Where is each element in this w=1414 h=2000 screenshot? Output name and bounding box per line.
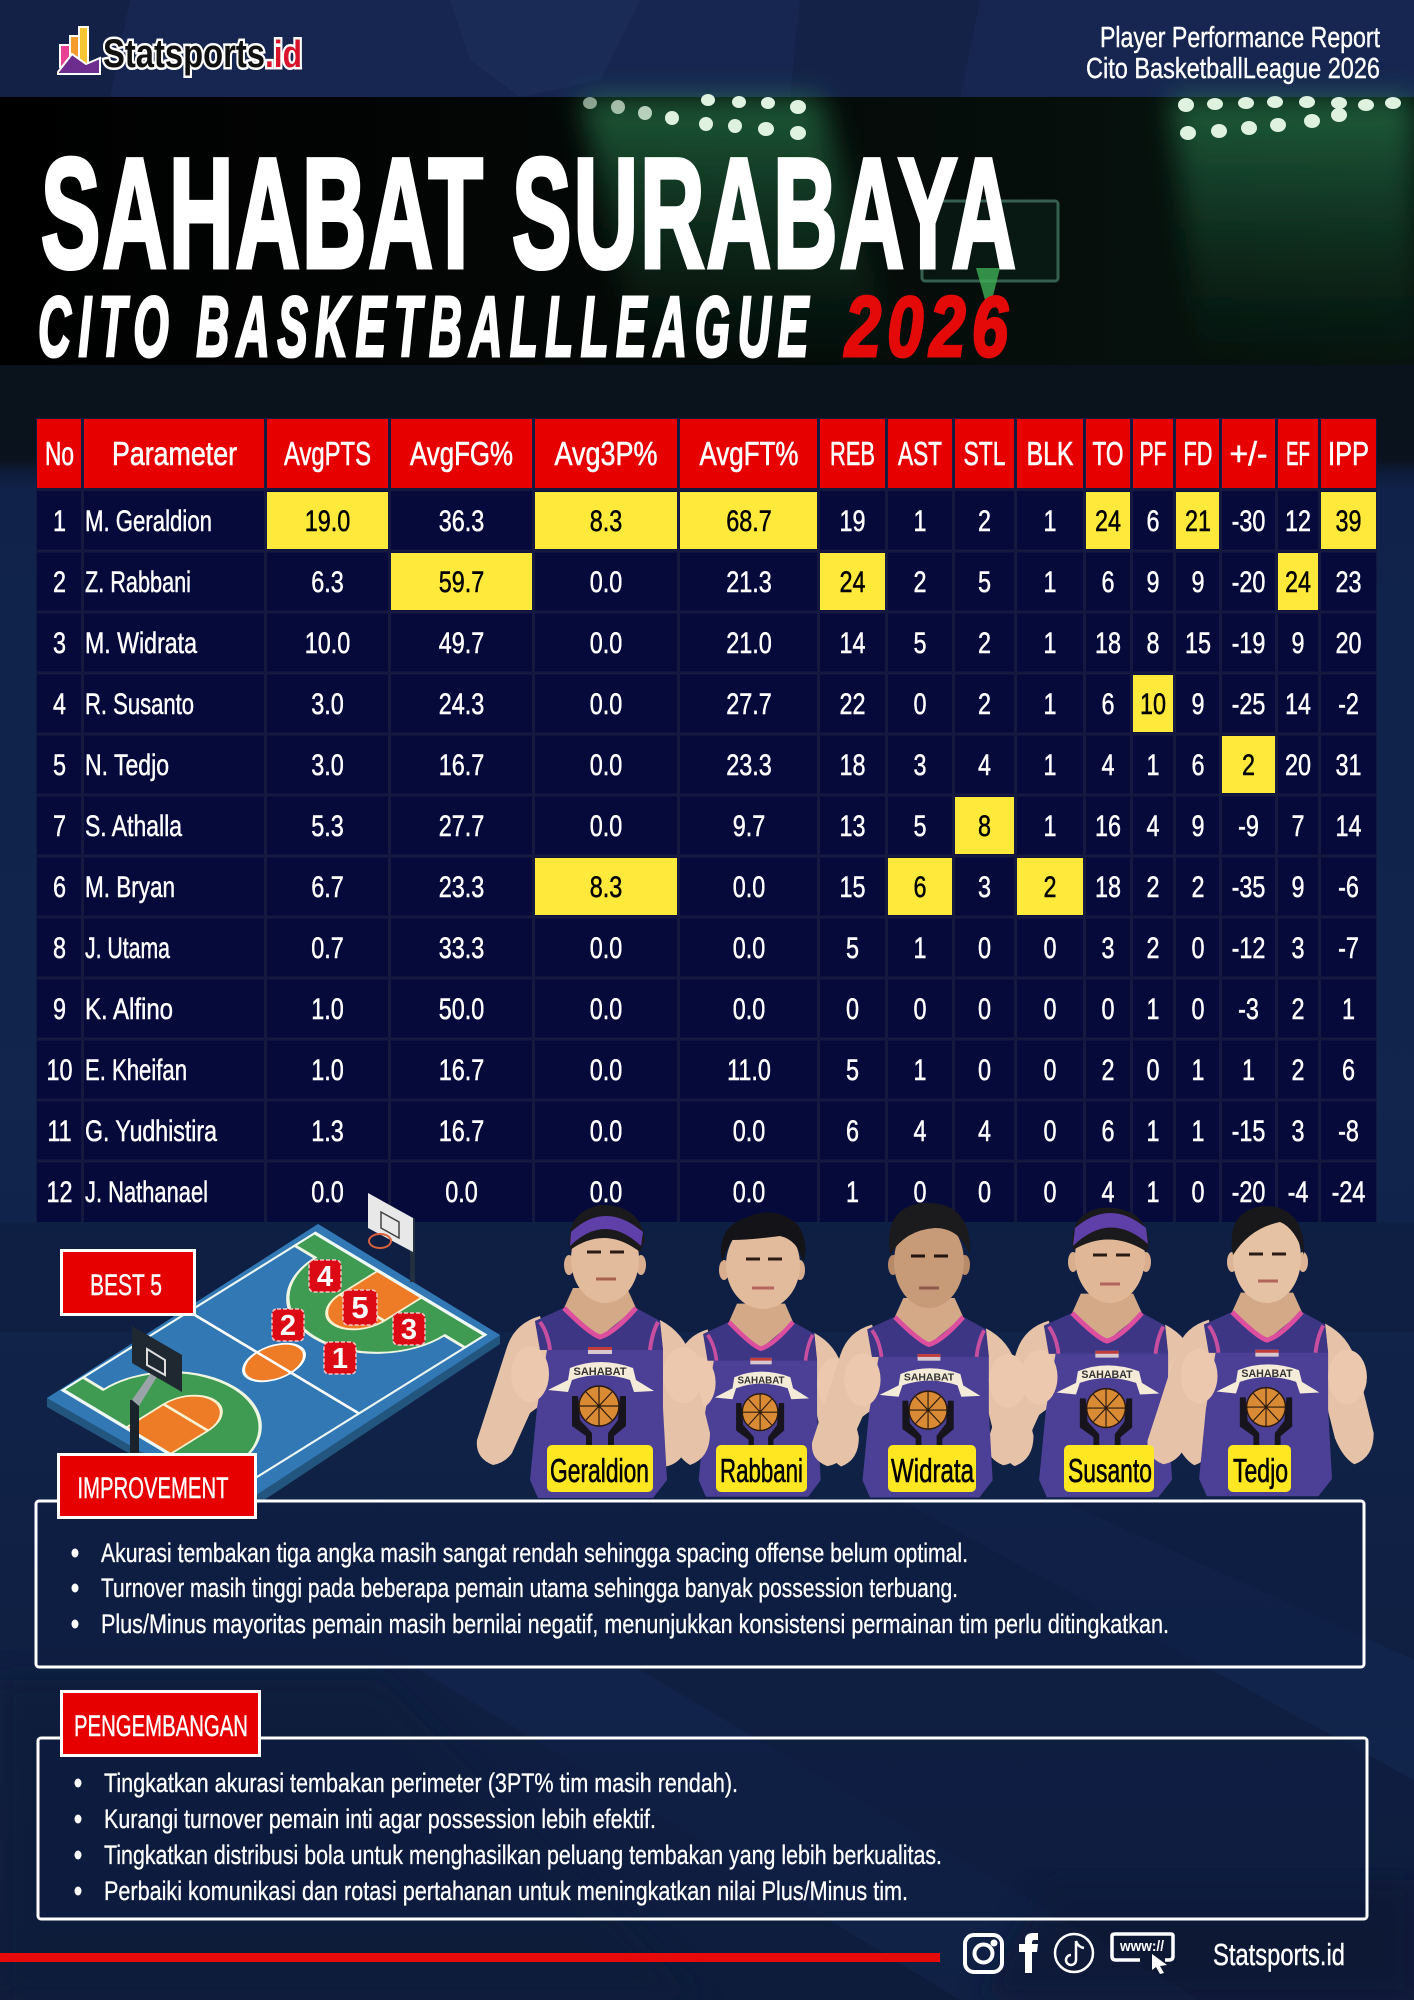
row: J. Nathanael: 1 <box>1146 1175 1160 1209</box>
row: Z. Rabbani <box>53 565 1362 599</box>
row: N. Tedjo: 2 <box>1242 748 1255 782</box>
row: M. Bryan: 18 <box>1095 870 1121 904</box>
row: G. Yudhistira: 6 <box>1101 1114 1115 1148</box>
row: S. Athalla: 16 <box>1095 809 1121 843</box>
row: N. Tedjo: 31 <box>1335 748 1362 782</box>
isometric court with best five positions <box>47 1193 500 1516</box>
player: Rabbani: SAHABAT <box>737 1376 785 1387</box>
row: E. Kheifan <box>46 1053 1355 1087</box>
row: M. Widrata: 3 <box>53 626 66 660</box>
row: Z. Rabbani: Z. Rabbani <box>85 566 191 599</box>
tag: PENGEMBANGAN: PENGEMBANGAN <box>74 1710 248 1743</box>
row: M. Widrata: 15 <box>1185 626 1211 660</box>
icon: floodlights left cluster <box>583 94 806 140</box>
table header row: AvgFT% <box>700 435 798 472</box>
table body cells <box>37 491 1376 1222</box>
row: E. Kheifan: 5 <box>846 1053 859 1087</box>
position marker 2: 2 <box>280 1310 296 1342</box>
position marker 1: 1 <box>332 1343 348 1375</box>
icon: facebook <box>1019 1933 1038 1973</box>
row: M. Bryan: -6 <box>1338 870 1359 904</box>
table header row: AvgFG% <box>410 435 513 472</box>
table header row: Parameter <box>112 435 237 472</box>
player: Geraldion <box>477 1205 710 1498</box>
row: M. Geraldion: 68.7 <box>726 504 772 538</box>
row: M. Bryan: M. Bryan <box>85 871 175 904</box>
row: J. Nathanael: 4 <box>1101 1175 1115 1209</box>
row: R. Susanto <box>53 687 1359 721</box>
row: K. Alfino: 0.0 <box>733 992 765 1026</box>
row: J. Nathanael: 0 <box>1191 1175 1205 1209</box>
row: J. Nathanael: 0.0 <box>590 1175 622 1209</box>
row: S. Athalla: 7 <box>53 809 66 843</box>
player: Geraldion: SAHABAT <box>574 1366 627 1378</box>
row: G. Yudhistira: 3 <box>1291 1114 1305 1148</box>
row: J. Nathanael: 12 <box>46 1175 73 1209</box>
row: M. Widrata: 14 <box>839 626 866 660</box>
row: M. Geraldion: M. Geraldion <box>85 505 212 538</box>
position marker 4: 4 <box>317 1261 333 1293</box>
row: J. Nathanael: -20 <box>1232 1175 1265 1209</box>
row: M. Bryan: 23.3 <box>439 870 484 904</box>
highlighted best values <box>267 492 1376 915</box>
player: Susanto <box>987 1208 1214 1497</box>
improvement bullets <box>72 1538 1169 1639</box>
row: J. Utama: 0 <box>978 931 991 965</box>
tag: IMPROVEMENT <box>58 1454 256 1518</box>
row: G. Yudhistira: 1 <box>1146 1114 1160 1148</box>
row: J. Utama: 1 <box>913 931 927 965</box>
player: Susanto: SAHABAT <box>1081 1369 1133 1381</box>
table header row: STL <box>964 435 1006 472</box>
icon: background hoop <box>922 201 1058 300</box>
table header row: TO <box>1092 435 1124 472</box>
row: M. Widrata: -19 <box>1232 626 1265 660</box>
row: R. Susanto: -25 <box>1232 687 1265 721</box>
improvement bullets: Plus/Minus mayoritas pemain masih bernilai negatif, menunjukkan konsistensi permainan tim perlu ditingkatkan. <box>101 1609 1169 1639</box>
row: E. Kheifan: 2 <box>1101 1053 1115 1087</box>
row: J. Nathanael: -24 <box>1332 1175 1365 1209</box>
row: J. Nathanael: 1 <box>846 1175 859 1209</box>
row: J. Utama: 0.7 <box>311 931 344 965</box>
row: R. Susanto: 0 <box>913 687 927 721</box>
row: N. Tedjo: 4 <box>978 748 991 782</box>
row: R. Susanto: 3.0 <box>311 687 344 721</box>
row: M. Bryan: 6 <box>53 870 66 904</box>
row: S. Athalla: -9 <box>1238 809 1259 843</box>
name tag: Tedjo: Tedjo <box>1233 1452 1288 1489</box>
row: K. Alfino: 1.0 <box>311 992 344 1026</box>
name tag: Geraldion: Geraldion <box>550 1452 649 1489</box>
row: M. Geraldion: 8.3 <box>590 504 622 538</box>
row: M. Bryan: -35 <box>1232 870 1265 904</box>
row: Z. Rabbani: 59.7 <box>439 565 484 599</box>
position marker 3: 3 <box>401 1314 417 1346</box>
row: G. Yudhistira: -8 <box>1338 1114 1359 1148</box>
row: Z. Rabbani: 24 <box>839 565 866 599</box>
row: N. Tedjo: 1 <box>1146 748 1160 782</box>
pengembangan bullets: Perbaiki komunikasi dan rotasi pertahanan untuk meningkatkan nilai Plus/Minus tim. <box>104 1876 908 1906</box>
row: J. Nathanael: 0 <box>978 1175 991 1209</box>
row: E. Kheifan: 1 <box>1191 1053 1205 1087</box>
row: M. Geraldion: 1 <box>1043 504 1057 538</box>
row: M. Bryan: 0.0 <box>733 870 765 904</box>
row: S. Athalla: 7 <box>1291 809 1305 843</box>
row: S. Athalla <box>53 809 1362 843</box>
row: N. Tedjo: 4 <box>1101 748 1115 782</box>
row: Z. Rabbani: 23 <box>1335 565 1362 599</box>
row: J. Utama: 3 <box>1291 931 1305 965</box>
name tag: Geraldion <box>547 1445 653 1492</box>
row: M. Geraldion: -30 <box>1232 504 1265 538</box>
row: J. Utama: -12 <box>1232 931 1265 965</box>
row: G. Yudhistira: G. Yudhistira <box>85 1115 217 1148</box>
row: M. Geraldion: 1 <box>913 504 927 538</box>
row: M. Widrata: 49.7 <box>439 626 484 660</box>
improvement bullets: Turnover masih tinggi pada beberapa pemain utama sehingga banyak possession terbuang. <box>101 1573 958 1603</box>
row: M. Widrata <box>53 626 1362 660</box>
row: J. Nathanael: 0.0 <box>733 1175 765 1209</box>
table header row: IPP <box>1328 435 1369 472</box>
row: K. Alfino: 1 <box>1146 992 1160 1026</box>
name tag: Tedjo <box>1228 1445 1291 1492</box>
name tag: Susanto <box>1064 1445 1154 1492</box>
row: M. Geraldion: 36.3 <box>439 504 484 538</box>
player: Tedjo: SAHABAT <box>1241 1368 1293 1380</box>
row: K. Alfino: 1 <box>1342 992 1355 1026</box>
row: K. Alfino: 0 <box>1043 992 1057 1026</box>
tag: IMPROVEMENT: IMPROVEMENT <box>78 1472 228 1505</box>
row: J. Utama: J. Utama <box>85 932 170 965</box>
row: K. Alfino: K. Alfino <box>85 993 173 1026</box>
row: G. Yudhistira: 4 <box>978 1114 991 1148</box>
row: M. Widrata: 1 <box>1043 626 1057 660</box>
hero panel: stadium lights and hoop <box>0 94 1414 365</box>
row: J. Nathanael: 0 <box>913 1175 927 1209</box>
row: N. Tedjo: N. Tedjo <box>85 749 169 782</box>
player: Widrata <box>812 1203 1034 1498</box>
row: Z. Rabbani: 6 <box>1101 565 1115 599</box>
row: K. Alfino: 0 <box>978 992 991 1026</box>
row: G. Yudhistira: 16.7 <box>439 1114 484 1148</box>
row: Z. Rabbani: 0.0 <box>590 565 622 599</box>
table header row: +/- <box>1230 435 1268 472</box>
row: Z. Rabbani: -20 <box>1232 565 1265 599</box>
row: R. Susanto: R. Susanto <box>85 688 194 721</box>
row: R. Susanto: 0.0 <box>590 687 622 721</box>
row: J. Utama: 5 <box>846 931 859 965</box>
row: M. Widrata: M. Widrata <box>85 627 197 660</box>
row: G. Yudhistira: 4 <box>913 1114 927 1148</box>
name tag: Susanto: Susanto <box>1068 1452 1152 1489</box>
row: M. Widrata: 9 <box>1291 626 1305 660</box>
row: M. Widrata: 20 <box>1335 626 1362 660</box>
row: E. Kheifan: 0 <box>978 1053 991 1087</box>
row: M. Bryan: 9 <box>1291 870 1305 904</box>
row: N. Tedjo: 0.0 <box>590 748 622 782</box>
row: E. Kheifan: 16.7 <box>439 1053 484 1087</box>
row: R. Susanto: 1 <box>1043 687 1057 721</box>
table header row: FD <box>1184 435 1212 472</box>
row: N. Tedjo: 20 <box>1285 748 1311 782</box>
row: M. Widrata: 5 <box>913 626 927 660</box>
row: Z. Rabbani: 6.3 <box>311 565 344 599</box>
footer brand: Statsports.id <box>1213 1937 1345 1972</box>
row: M. Geraldion <box>53 504 1362 538</box>
row: R. Susanto: -2 <box>1338 687 1359 721</box>
row: S. Athalla: 8 <box>978 809 991 843</box>
row: J. Nathanael: 0.0 <box>311 1175 344 1209</box>
logo: Statsports.id: Statsports <box>103 32 265 76</box>
row: S. Athalla: 5 <box>913 809 927 843</box>
row: N. Tedjo: 6 <box>1191 748 1205 782</box>
row: G. Yudhistira: 0.0 <box>590 1114 622 1148</box>
row: J. Nathanael: -4 <box>1288 1175 1308 1209</box>
row: E. Kheifan: 10 <box>46 1053 73 1087</box>
row: J. Utama: 0 <box>1191 931 1205 965</box>
row: R. Susanto: 2 <box>978 687 991 721</box>
icon: far hoop <box>368 1193 415 1282</box>
table header row: No <box>45 435 74 472</box>
table header row <box>37 419 1376 488</box>
row: N. Tedjo: 5 <box>53 748 66 782</box>
row: M. Bryan: 8.3 <box>590 870 622 904</box>
player: Widrata: SAHABAT <box>904 1373 955 1384</box>
row: G. Yudhistira: 6 <box>846 1114 859 1148</box>
row: S. Athalla: 9.7 <box>733 809 765 843</box>
row: E. Kheifan: 0.0 <box>590 1053 622 1087</box>
row: N. Tedjo: 3.0 <box>311 748 344 782</box>
row: Z. Rabbani: 2 <box>913 565 927 599</box>
row: G. Yudhistira: 0 <box>1043 1114 1057 1148</box>
row: J. Nathanael: J. Nathanael <box>85 1176 208 1209</box>
row: M. Geraldion: 2 <box>978 504 991 538</box>
row: M. Geraldion: 19 <box>839 504 866 538</box>
row: K. Alfino: 9 <box>53 992 66 1026</box>
row: J. Utama: 8 <box>53 931 66 965</box>
row: S. Athalla: 5.3 <box>311 809 344 843</box>
row: Z. Rabbani: 24 <box>1285 565 1311 599</box>
row: R. Susanto: 9 <box>1191 687 1205 721</box>
row: J. Utama: 2 <box>1146 931 1160 965</box>
icon: tiktok <box>1055 1934 1093 1972</box>
row: M. Geraldion: 1 <box>53 504 66 538</box>
icon: floodlights right cluster <box>1178 96 1401 140</box>
row: M. Bryan: 15 <box>839 870 866 904</box>
position marker 4 <box>309 1260 341 1293</box>
row: M. Bryan: 2 <box>1191 870 1205 904</box>
panel: improvement <box>36 1454 1364 1667</box>
position marker 3 <box>393 1313 425 1346</box>
position marker 5 <box>343 1290 377 1325</box>
row: M. Widrata: 2 <box>978 626 991 660</box>
row: G. Yudhistira: 1.3 <box>311 1114 344 1148</box>
logo: Statsports.id: .id <box>265 34 302 76</box>
tag: PENGEMBANGAN <box>62 1692 260 1756</box>
row: K. Alfino: 0 <box>913 992 927 1026</box>
position marker 1 <box>324 1342 356 1375</box>
name tag: Rabbani <box>716 1445 807 1492</box>
row: S. Athalla: 0.0 <box>590 809 622 843</box>
row: R. Susanto: 27.7 <box>726 687 772 721</box>
row: N. Tedjo: 23.3 <box>726 748 772 782</box>
name tag: Widrata <box>888 1445 976 1492</box>
row: S. Athalla: 9 <box>1191 809 1205 843</box>
row: E. Kheifan: 11.0 <box>727 1053 771 1087</box>
players: best five photos <box>477 1203 1374 1498</box>
position marker 2 <box>272 1309 304 1342</box>
row: K. Alfino: 2 <box>1291 992 1305 1026</box>
table header row: REB <box>830 435 875 472</box>
row: E. Kheifan: 1 <box>1242 1053 1255 1087</box>
row: G. Yudhistira <box>47 1114 1359 1148</box>
row: E. Kheifan: 1.0 <box>311 1053 344 1087</box>
row: E. Kheifan: E. Kheifan <box>85 1054 187 1087</box>
row: J. Utama: 0.0 <box>590 931 622 965</box>
row: R. Susanto: 10 <box>1140 687 1166 721</box>
row: M. Geraldion: 21 <box>1185 504 1211 538</box>
row: J. Nathanael: 0.0 <box>445 1175 478 1209</box>
icon: website: www:// <box>1119 1938 1165 1955</box>
row: M. Widrata: 21.0 <box>726 626 772 660</box>
subtitle: league name: 2026 <box>843 280 1014 375</box>
improvement bullets: Akurasi tembakan tiga angka masih sangat rendah sehingga spacing offense belum optimal. <box>101 1538 968 1568</box>
row: R. Susanto: 4 <box>53 687 66 721</box>
pengembangan bullets <box>74 1768 942 1906</box>
row: Z. Rabbani: 5 <box>978 565 991 599</box>
red footer bar <box>0 1953 940 1962</box>
row: S. Athalla: 14 <box>1335 809 1362 843</box>
row: J. Utama: 3 <box>1101 931 1115 965</box>
row: J. Nathanael: 0 <box>1043 1175 1057 1209</box>
row: E. Kheifan: 2 <box>1291 1053 1305 1087</box>
table header row: AvgPTS <box>284 435 371 472</box>
row: G. Yudhistira: -15 <box>1232 1114 1265 1148</box>
row: M. Bryan: 2 <box>1043 870 1057 904</box>
table header row: PF <box>1140 435 1166 472</box>
row: S. Athalla: 27.7 <box>439 809 484 843</box>
pengembangan bullets: Tingkatkan distribusi bola untuk menghasilkan peluang tembakan yang lebih berkualitas. <box>104 1840 942 1870</box>
panel: pengembangan <box>38 1692 1367 1919</box>
player: Rabbani <box>651 1212 859 1497</box>
row: J. Utama: 0.0 <box>733 931 765 965</box>
row: Z. Rabbani: 21.3 <box>726 565 772 599</box>
row: G. Yudhistira: 11 <box>47 1114 72 1148</box>
row: M. Geraldion: 39 <box>1335 504 1362 538</box>
row: R. Susanto: 22 <box>839 687 866 721</box>
icon: near hoop <box>130 1326 182 1455</box>
row: M. Bryan: 3 <box>978 870 991 904</box>
statistics table <box>36 418 1377 1222</box>
row: J. Utama <box>53 931 1359 965</box>
row: M. Geraldion: 12 <box>1285 504 1311 538</box>
row: K. Alfino: 0 <box>1191 992 1205 1026</box>
row: R. Susanto: 24.3 <box>439 687 484 721</box>
row: N. Tedjo: 16.7 <box>439 748 484 782</box>
row: N. Tedjo: 18 <box>839 748 866 782</box>
name tag: Widrata: Widrata <box>891 1452 974 1489</box>
tag: BEST 5 <box>62 1250 194 1314</box>
row: R. Susanto: 14 <box>1285 687 1311 721</box>
row: K. Alfino <box>53 992 1355 1026</box>
row: Z. Rabbani: 9 <box>1146 565 1160 599</box>
row: E. Kheifan: 6 <box>1342 1053 1355 1087</box>
row: M. Widrata: 0.0 <box>590 626 622 660</box>
row: S. Athalla: 4 <box>1146 809 1160 843</box>
row: M. Bryan: 6.7 <box>311 870 344 904</box>
row: K. Alfino: 50.0 <box>439 992 484 1026</box>
row: J. Utama: 0 <box>1043 931 1057 965</box>
position marker 5: 5 <box>351 1290 369 1325</box>
row: E. Kheifan: 1 <box>913 1053 927 1087</box>
row: G. Yudhistira: 1 <box>1191 1114 1205 1148</box>
row: M. Bryan <box>53 870 1359 904</box>
pengembangan bullets: Kurangi turnover pemain inti agar possession lebih efektif. <box>104 1804 656 1834</box>
row: M. Geraldion: 24 <box>1095 504 1121 538</box>
footer <box>0 1933 1345 1974</box>
row: M. Bryan: 2 <box>1146 870 1160 904</box>
name tag: Rabbani: Rabbani <box>720 1452 803 1489</box>
row: Z. Rabbani: 2 <box>53 565 66 599</box>
row: K. Alfino: 0.0 <box>590 992 622 1026</box>
row: J. Nathanael <box>46 1175 1365 1209</box>
row: M. Widrata: 8 <box>1146 626 1160 660</box>
table header row: AST <box>898 435 942 472</box>
row: M. Geraldion: 6 <box>1146 504 1160 538</box>
row: G. Yudhistira: 0.0 <box>733 1114 765 1148</box>
pengembangan bullets: Tingkatkan akurasi tembakan perimeter (3PT% tim masih rendah). <box>104 1768 738 1798</box>
row: Z. Rabbani: 9 <box>1191 565 1205 599</box>
row: M. Bryan: 6 <box>913 870 927 904</box>
tag: BEST 5: BEST 5 <box>90 1269 162 1302</box>
icon: instagram <box>965 1935 1002 1972</box>
row: K. Alfino: -3 <box>1238 992 1259 1026</box>
row: M. Geraldion: 19.0 <box>305 504 350 538</box>
row: S. Athalla: 1 <box>1043 809 1057 843</box>
row: J. Utama: 33.3 <box>439 931 484 965</box>
row: R. Susanto: 6 <box>1101 687 1115 721</box>
icon: website <box>1112 1934 1173 1974</box>
row: S. Athalla: S. Athalla <box>85 810 182 843</box>
table header row: EF <box>1286 435 1310 472</box>
table header row: Avg3P% <box>554 435 658 472</box>
row: K. Alfino: 0 <box>1101 992 1115 1026</box>
row: N. Tedjo: 1 <box>1043 748 1057 782</box>
row: M. Widrata: 10.0 <box>305 626 350 660</box>
player: Tedjo <box>1147 1206 1374 1496</box>
row: Z. Rabbani: 1 <box>1043 565 1057 599</box>
row: E. Kheifan: 0 <box>1043 1053 1057 1087</box>
row: J. Utama: -7 <box>1338 931 1359 965</box>
table header row: BLK <box>1026 435 1074 472</box>
row: N. Tedjo <box>53 748 1362 782</box>
row: E. Kheifan: 0 <box>1146 1053 1160 1087</box>
row: S. Athalla: 13 <box>839 809 866 843</box>
report label top right <box>1086 22 1380 85</box>
row: M. Widrata: 18 <box>1095 626 1121 660</box>
row: K. Alfino: 0 <box>846 992 859 1026</box>
row: N. Tedjo: 3 <box>913 748 927 782</box>
